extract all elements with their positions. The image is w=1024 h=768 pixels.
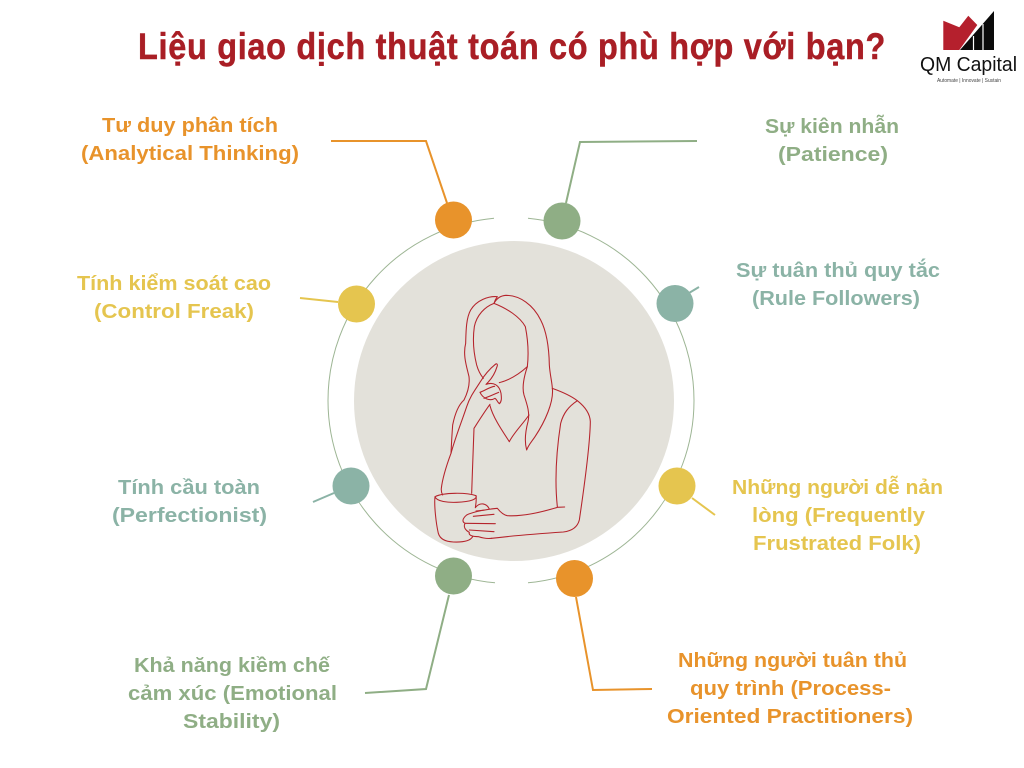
label: perfectionist: Tính cầu toàn	[118, 477, 260, 499]
label: analytical thinking	[81, 115, 299, 165]
outer ring	[328, 218, 694, 583]
label: frequently frustrated folk: Những người dễ nản	[732, 475, 943, 499]
logo: QM Capital: QM Capital	[920, 54, 1017, 76]
label: frequently frustrated folk: lòng (Frequently	[752, 505, 926, 527]
label: rule followers: (Rule Followers)	[752, 288, 920, 310]
label: patience: Sự kiên nhẫn	[765, 114, 899, 138]
dot: green top	[544, 202, 580, 240]
cup	[435, 493, 476, 542]
label: process oriented practitioners: Oriented Practitioners)	[667, 706, 913, 728]
shoulder and arm	[492, 388, 590, 538]
logo: QM Capital: Automate | Innovate | Sustain	[937, 78, 1001, 84]
label: patience	[765, 114, 899, 166]
connector: process oriented	[576, 597, 652, 690]
label: rule followers: Sự tuân thủ quy tắc	[736, 258, 940, 282]
label: frequently frustrated folk	[732, 475, 943, 555]
connector: perfectionist	[313, 493, 334, 502]
connector: frequently frustrated	[692, 498, 715, 515]
label: process oriented practitioners: Những người tuân thủ	[678, 650, 907, 672]
label: perfectionist	[112, 477, 267, 527]
connector: rule followers	[689, 287, 699, 293]
connector: control freak	[300, 298, 338, 302]
label: control freak	[77, 273, 271, 323]
dot: yellow left	[338, 286, 375, 322]
left hair and face	[464, 297, 497, 400]
label: frequently frustrated folk: Frustrated Folk)	[753, 533, 921, 555]
label: perfectionist: (Perfectionist)	[112, 505, 267, 527]
dot: green bottom	[435, 558, 472, 594]
label: rule followers	[736, 258, 940, 310]
dot: yellow right	[658, 468, 696, 504]
title: Liệu giao dịch thuật toán có phù hợp với bạn?	[138, 26, 886, 67]
label: emotional stability: Stability)	[183, 711, 280, 733]
dot: orange bottom	[556, 560, 593, 597]
connector: analytical thinking	[331, 141, 447, 203]
label: emotional stability: cảm xúc (Emotional	[128, 683, 337, 705]
connector: emotional stability	[365, 595, 449, 693]
dot: teal right	[656, 285, 694, 322]
central circle	[354, 241, 674, 561]
logo: QM Capital	[920, 11, 1017, 84]
label: emotional stability: Khả năng kiềm chế	[134, 655, 331, 677]
label: emotional stability	[128, 655, 337, 733]
dot: orange top	[435, 202, 472, 238]
connector: patience	[566, 141, 697, 203]
label: process oriented practitioners	[667, 650, 913, 728]
label: analytical thinking: (Analytical Thinking)	[81, 143, 299, 165]
hair	[494, 295, 553, 450]
label: control freak: Tính kiểm soát cao	[77, 273, 271, 295]
hand and finger	[441, 364, 495, 495]
illustration: woman thinking with cup	[435, 295, 590, 542]
label: analytical thinking: Tư duy phân tích	[102, 115, 278, 137]
dot: teal left	[332, 468, 370, 504]
label: patience: (Patience)	[778, 144, 888, 166]
label: control freak: (Control Freak)	[94, 301, 254, 323]
label: process oriented practitioners: quy trình (Process-	[690, 678, 891, 700]
